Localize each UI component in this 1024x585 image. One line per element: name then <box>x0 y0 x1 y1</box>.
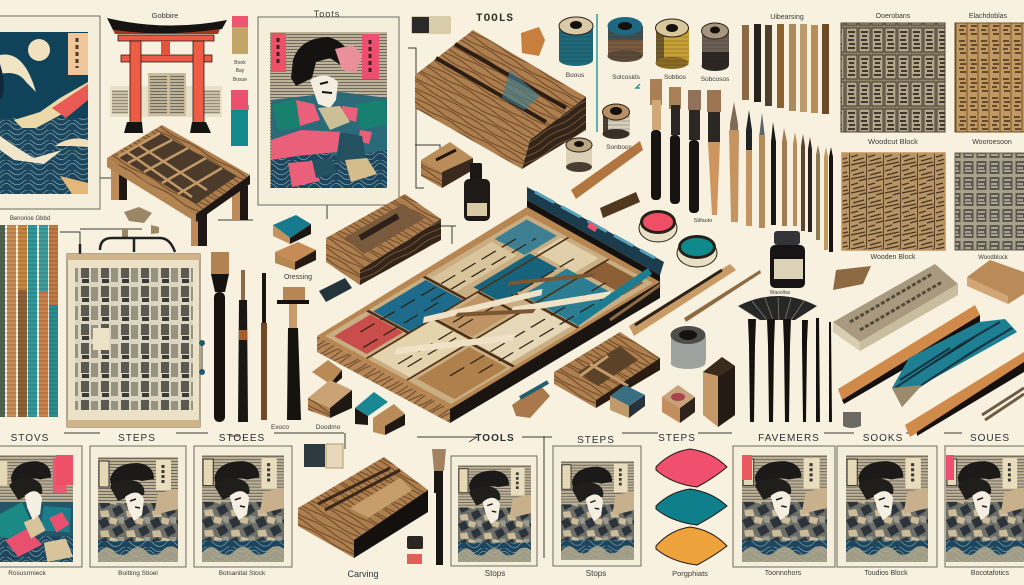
icon: teal diamond <box>656 489 727 525</box>
chart-like colour strips <box>0 225 58 417</box>
icon: stacked ink blocks <box>273 215 316 270</box>
sticks row <box>742 24 829 114</box>
label: sticks heading: Uibearsing <box>770 14 804 21</box>
swatches: colour chips <box>231 16 248 146</box>
sheet labels: Wooden Block <box>870 254 916 261</box>
paper behind gate <box>110 73 222 117</box>
captions: Stops <box>485 569 505 578</box>
icon: ink box label <box>411 16 451 34</box>
section headings: STEPS <box>118 433 156 444</box>
section headings: STOEES <box>219 433 265 444</box>
swatches: colour chips: Bosue <box>233 77 247 83</box>
heading: tools: TOOLS <box>476 13 514 25</box>
section headings: SOOKS <box>863 433 903 444</box>
icon: ink cup <box>670 326 706 369</box>
sheet labels: Wooroesoon <box>972 139 1012 146</box>
icon: thin rods <box>982 388 1024 420</box>
arrow: dot markers <box>199 340 205 375</box>
label: strips heading: Benorioe Gbbd <box>10 216 50 222</box>
label: gate heading: Gobbire <box>152 11 178 20</box>
icon: torii gate <box>107 18 227 133</box>
swatches: colour chips: Bay <box>236 68 245 74</box>
icon: ink splash <box>521 27 545 56</box>
spool captions <box>566 72 730 151</box>
decorative connectors <box>60 48 962 558</box>
icon: spools <box>559 17 729 172</box>
panel: wave print <box>0 16 100 209</box>
icon: corner wood block <box>967 260 1024 304</box>
icon: small swatch card <box>304 444 343 468</box>
red tab <box>742 455 752 480</box>
icon: pink diamond <box>656 449 727 487</box>
icon: small ruler <box>600 192 640 218</box>
panel: print step 5 <box>553 446 641 566</box>
sheet labels: Woodblock <box>978 255 1009 261</box>
ruler strip along top edge <box>527 187 664 282</box>
spool captions: Boous <box>566 72 585 79</box>
icon: fan brushes <box>738 296 832 422</box>
swatches: colour chips: Book <box>234 60 246 66</box>
panel: print step 7 <box>837 446 937 567</box>
spool captions: Sobbos <box>664 74 687 81</box>
geisha artwork <box>270 32 387 188</box>
captions: Doodmo <box>316 424 341 431</box>
section headings <box>11 433 1010 446</box>
icon: small jar <box>843 412 861 428</box>
small spool lower <box>566 138 592 172</box>
captions: Boitting Stioel <box>118 570 158 577</box>
brushes: left group <box>211 252 309 422</box>
panel: print step 6 <box>733 446 835 567</box>
brushes: graded row <box>650 79 833 252</box>
captions: Rosusrmieck <box>8 570 47 577</box>
section headings: STEPS <box>658 433 696 444</box>
icon: flat stick <box>571 141 643 199</box>
sheet labels <box>868 13 1012 261</box>
icon: square chip <box>610 385 645 418</box>
section headings: TOOLS <box>475 433 515 444</box>
spool captions: Sonboos <box>606 144 633 151</box>
captions: Carving <box>347 569 379 579</box>
label: brush caption: Stifauto <box>694 218 712 224</box>
pink cartouche <box>56 455 73 485</box>
icon: lower small block <box>512 382 550 418</box>
captions: Botsanital Stock <box>219 570 266 577</box>
sheet labels: Ooerobans <box>876 13 911 20</box>
sheet labels: Woodcut Block <box>868 137 918 146</box>
captions <box>8 424 1010 579</box>
panel: tan script sheet <box>955 23 1024 132</box>
captions: Porgphiats <box>672 569 708 578</box>
icon: paint pot teal <box>677 235 717 267</box>
spool: teal <box>559 17 593 66</box>
icon: upper wooden bar <box>838 305 980 404</box>
section headings: FAVEMERS <box>758 433 820 444</box>
icon: carving block <box>298 457 428 558</box>
panel: print step 2 <box>90 446 186 567</box>
panel: print step 3 <box>194 446 292 567</box>
icon: ink bottle <box>464 163 490 221</box>
icon: small ink bottle <box>407 536 423 564</box>
icon: dark roller <box>319 278 352 302</box>
panel: hanging scroll <box>67 238 200 427</box>
section headings: STEPS <box>577 435 615 446</box>
icon: compartment box <box>554 332 660 408</box>
captions: Exoco <box>271 424 289 431</box>
icon: lower brush <box>432 449 446 565</box>
section headings: STOVS <box>11 433 49 444</box>
captions: Bocotafotics <box>971 570 1010 577</box>
icon: ink jar <box>770 231 805 288</box>
icon: teal carved wood <box>892 319 1017 407</box>
panel: print step 4 <box>451 456 537 566</box>
spool: dark <box>702 23 729 71</box>
label: tools heading small: Toots <box>314 9 340 19</box>
sheet labels: Elachdoblas <box>969 13 1008 20</box>
small spool <box>602 104 630 139</box>
panel: print step 1 <box>0 446 82 567</box>
section headings: SOUES <box>970 433 1010 444</box>
spool captions: Solcosids <box>612 74 641 81</box>
panel: grey woodcut sheet <box>955 153 1024 250</box>
panel: carved grey sheet <box>841 23 945 132</box>
icon: small cube <box>662 385 695 423</box>
spool: blue-brown <box>608 17 643 62</box>
print sheet grid <box>75 268 193 410</box>
teal marker line <box>597 14 640 132</box>
icon: diagonal tools <box>572 264 871 336</box>
board artwork <box>325 215 653 404</box>
icon: small blocks under board <box>308 360 405 435</box>
captions: Toonnohors <box>765 570 802 577</box>
label: dressing: Oressing <box>284 274 312 281</box>
icon: paint pot pink <box>639 210 677 242</box>
icon: carved wooden box <box>326 194 441 285</box>
red cartouches <box>271 33 379 79</box>
sheet highlights <box>93 328 109 350</box>
icon: large wooden block <box>415 30 586 169</box>
panel: tan woodcut sheet <box>842 153 945 250</box>
panel: print step 8 <box>945 446 1024 567</box>
icon: wooden tray table <box>107 125 250 246</box>
pink tab <box>946 455 954 480</box>
icon: stone carved slab <box>833 264 958 351</box>
icon: orange diamond <box>656 527 727 565</box>
wave artwork <box>0 32 88 194</box>
label: jar caption: Waoollas <box>770 290 791 296</box>
icon: small wood block <box>421 142 473 188</box>
panel: geisha print <box>258 17 399 205</box>
icon: main carved printing board <box>317 187 664 423</box>
spool: ochre <box>656 19 689 69</box>
icon: tall block <box>703 357 735 427</box>
icon: lower wooden bar <box>905 352 1024 437</box>
captions: Toudios Block <box>864 570 908 577</box>
spool captions: Sobcosos <box>701 76 730 83</box>
icon: small scraps <box>122 207 159 237</box>
captions: Stops <box>586 569 606 578</box>
